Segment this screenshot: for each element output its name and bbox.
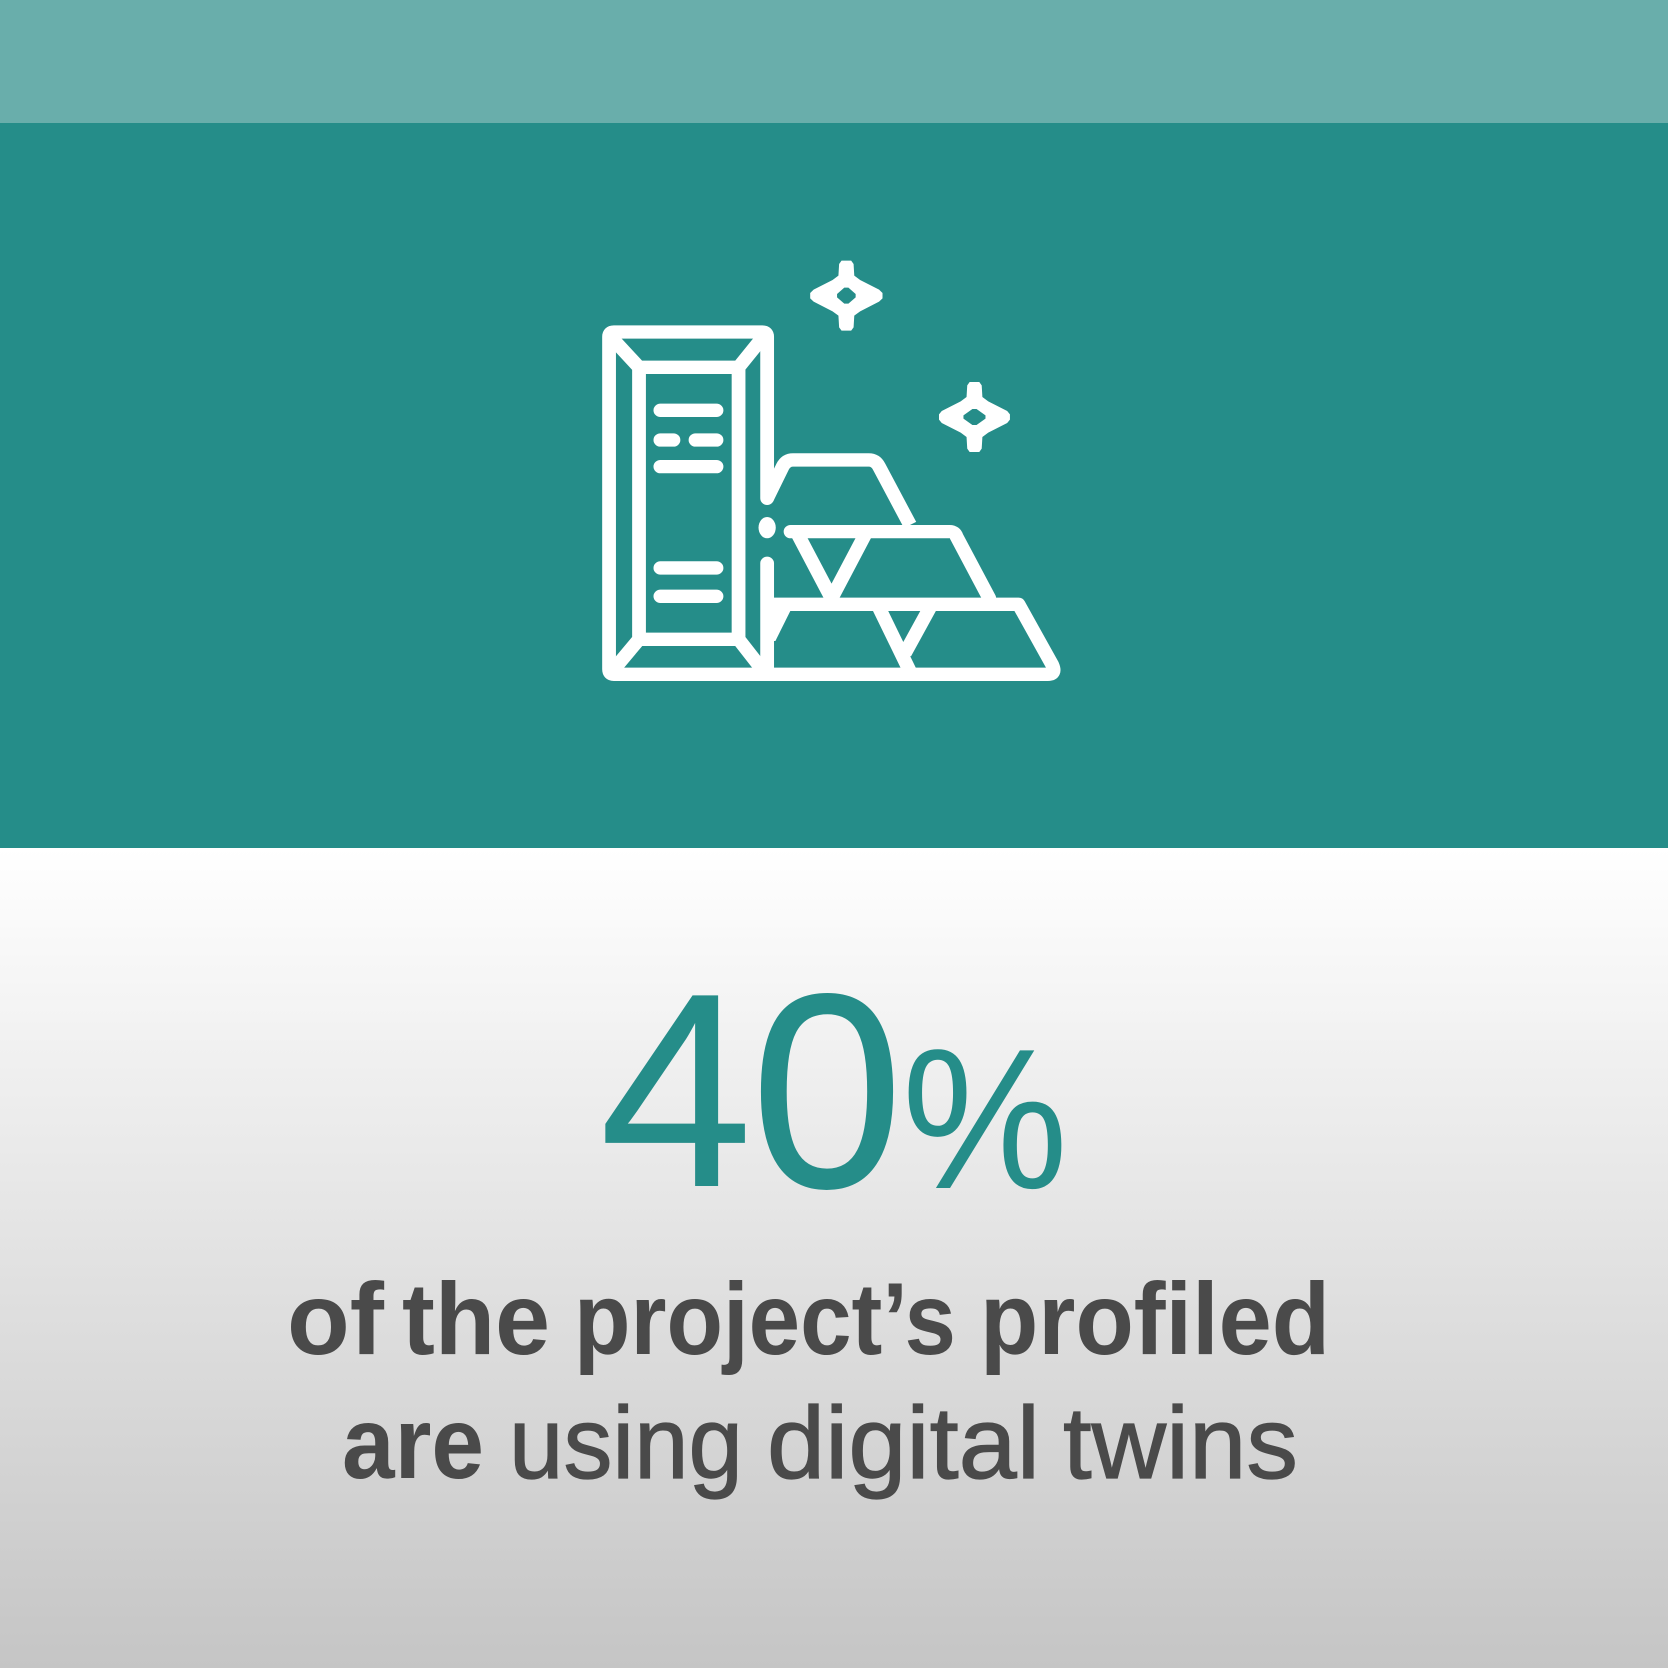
line two: digital — [767, 1386, 1040, 1500]
book gap dot — [759, 517, 776, 538]
sparkle small — [939, 382, 1010, 452]
statistic: 40%: 4 — [599, 935, 753, 1245]
sparkle large — [810, 261, 883, 331]
line one — [287, 1262, 1330, 1376]
line one: the — [402, 1262, 550, 1376]
line two: are — [342, 1386, 484, 1500]
panel: top light teal band — [0, 0, 1668, 123]
line two — [342, 1386, 1298, 1500]
line one: project’s — [574, 1262, 956, 1376]
bar facets — [796, 532, 932, 672]
book text lines — [660, 410, 717, 596]
text block: description — [287, 1262, 1330, 1500]
line one: profiled — [980, 1262, 1330, 1376]
panel: teal icon area — [0, 123, 1668, 848]
book inner frame — [612, 338, 762, 669]
gold bar wedge — [767, 604, 794, 641]
line two: twins — [1063, 1386, 1298, 1500]
statistic: 40% — [599, 935, 1068, 1246]
statistic: 40%: 0 — [751, 938, 903, 1246]
icon: digital twin ledger and gold bars — [609, 261, 1054, 674]
book outline — [609, 332, 1054, 674]
line two: using — [509, 1386, 743, 1500]
statistic: 40%: % — [902, 1008, 1068, 1231]
gold bars — [767, 460, 910, 525]
line one: of — [287, 1262, 385, 1376]
panel: grey gradient text area — [0, 848, 1668, 1668]
middle bar top — [791, 532, 989, 598]
